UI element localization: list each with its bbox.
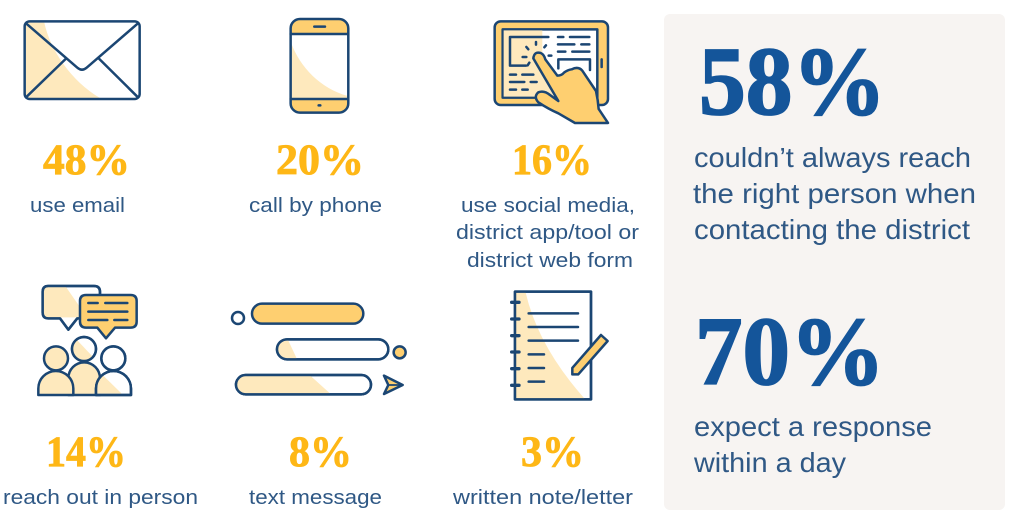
use email label: use email <box>30 194 125 217</box>
20% phone stat: 20% <box>276 137 364 184</box>
8% text message stat: 8% <box>289 429 352 476</box>
70% description <box>693 411 932 478</box>
reach out in person label: reach out in person <box>3 486 198 509</box>
icon: people with speech bubbles <box>38 286 137 395</box>
58% description <box>693 142 976 245</box>
58% description: the right person when <box>693 178 976 209</box>
14% in person stat: 14% <box>46 429 126 476</box>
social media, app and web form label: use social media, <box>461 194 635 217</box>
70% headline stat: 70% <box>695 298 885 406</box>
written note/letter label: written note/letter <box>452 486 633 509</box>
panel: key statistics background <box>664 14 1005 510</box>
text message label: text message <box>249 486 382 509</box>
icon: notebook and pencil <box>512 292 608 399</box>
58% headline stat: 58% <box>699 28 886 136</box>
icon: envelope <box>25 21 140 99</box>
48% email stat: 48% <box>43 137 130 184</box>
social media, app and web form label: district web form <box>467 249 633 272</box>
icon: text message bubbles <box>232 304 406 394</box>
70% description: within a day <box>693 447 846 478</box>
social media, app and web form label <box>456 194 639 272</box>
icon: tablet with pointing hand <box>495 21 608 123</box>
call by phone label: call by phone <box>249 194 382 217</box>
58% description: couldn’t always reach <box>694 142 971 173</box>
3% written note stat: 3% <box>521 429 584 476</box>
58% description: contacting the district <box>694 214 970 245</box>
social media, app and web form label: district app/tool or <box>456 221 639 244</box>
16% multi-channel stat: 16% <box>512 137 592 184</box>
70% description: expect a response <box>694 411 932 442</box>
icon: smartphone <box>291 19 348 113</box>
